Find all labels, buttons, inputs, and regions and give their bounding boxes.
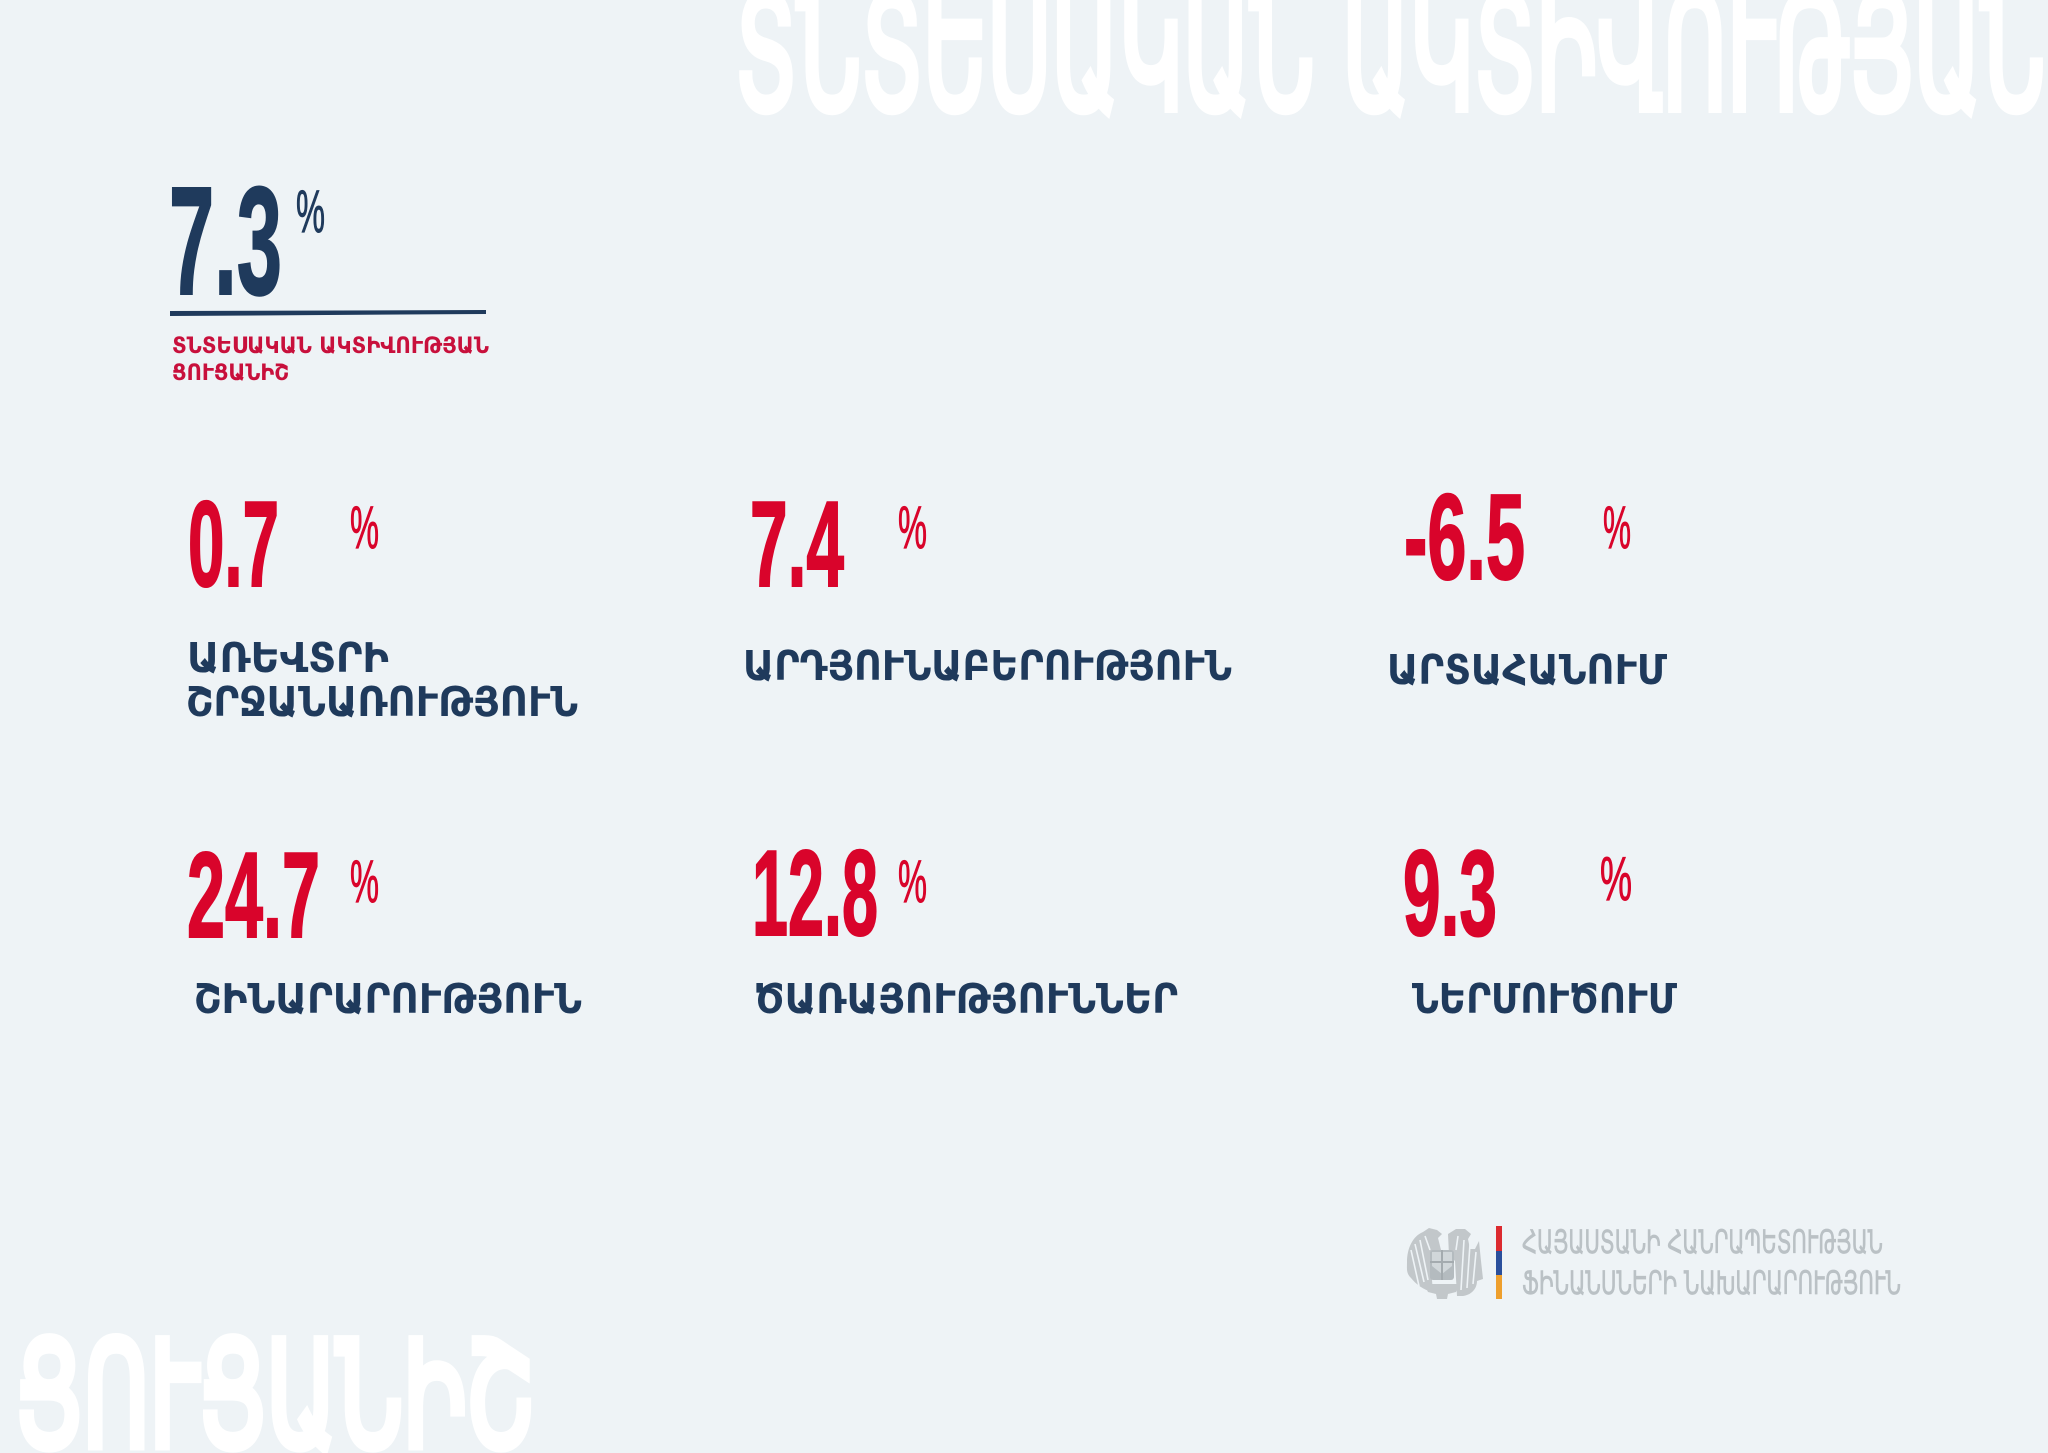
percent sign: % — [1603, 494, 1631, 561]
percent sign: % — [898, 848, 927, 915]
label: ՆԵՐՄՈՒԾՈՒՄ — [1412, 975, 1677, 1023]
label: ՇԻՆԱՐԱՐՈՒԹՅՈՒՆ — [194, 975, 582, 1023]
flag bar — [1496, 1226, 1502, 1299]
headline underline — [170, 310, 486, 316]
ministry name — [1522, 1223, 1901, 1302]
value 9.3: 9.3 — [1403, 825, 1497, 961]
value 12.8: 12.8 — [752, 825, 878, 961]
label: ՇՐՋԱՆԱՌՈՒԹՅՈՒՆ — [186, 678, 578, 726]
percent sign: % — [1600, 845, 1632, 914]
percent sign: % — [350, 494, 379, 561]
icon: coat of arms — [1407, 1228, 1483, 1299]
panel: headline indicator — [169, 155, 489, 386]
headline caption: ՏՆՏԵՍԱԿԱՆ ԱԿՏԻՎՈՒԹՅԱՆ — [172, 334, 489, 359]
label: ԱՐՏԱՀԱՆՈՒՄ — [1387, 646, 1667, 694]
headline caption — [172, 334, 489, 386]
percent sign: % — [350, 848, 379, 915]
headline caption: ՑՈՒՑԱՆԻՇ — [172, 361, 289, 386]
value 7.4: 7.4 — [750, 476, 844, 612]
panel: construction — [187, 827, 582, 1023]
label: ԱՌԵՎՏՐԻ — [187, 634, 389, 682]
headline percent sign: % — [296, 178, 325, 245]
panel: agriculture — [1387, 469, 1667, 694]
panel: imports — [1403, 825, 1677, 1023]
percent sign: % — [898, 494, 927, 561]
label: ԱՐԴՅՈՒՆԱԲԵՐՈՒԹՅՈՒՆ — [743, 642, 1232, 690]
value -6.5: -6.5 — [1404, 469, 1525, 605]
panel: foreign trade — [186, 476, 578, 726]
value 24.7: 24.7 — [187, 827, 320, 963]
value 0.7: 0.7 — [188, 476, 279, 612]
panel: services — [752, 825, 1178, 1023]
footer: ministry logo — [1407, 1223, 1901, 1302]
panel: industrial output — [743, 476, 1232, 690]
headline value: 7.3 — [169, 155, 282, 327]
label — [186, 634, 578, 726]
label: ԾԱՌԱՅՈՒԹՅՈՒՆՆԵՐ — [754, 975, 1178, 1023]
